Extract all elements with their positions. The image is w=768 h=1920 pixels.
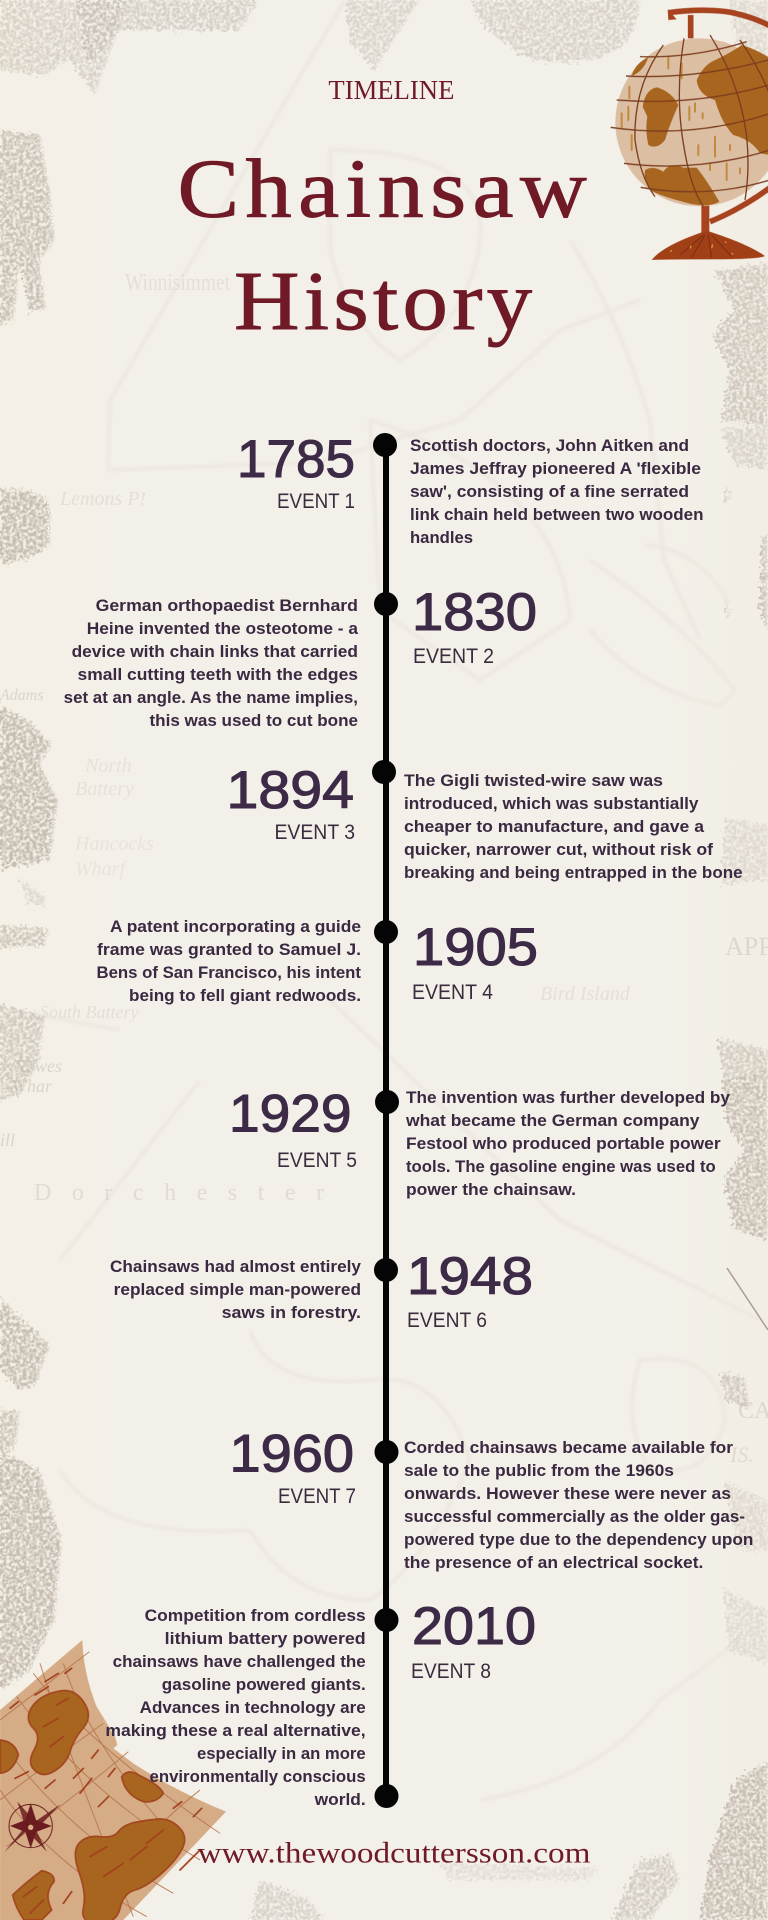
event 1 description bbox=[410, 437, 704, 547]
event 6 description: Chainsaws had almost entirely bbox=[110, 1258, 362, 1276]
event 8 heading: EVENT 8 bbox=[411, 1660, 491, 1683]
event 8 description: world. bbox=[314, 1791, 366, 1809]
event 8 description: especially in an more bbox=[197, 1745, 366, 1763]
event 5 description: what became the German company bbox=[405, 1112, 700, 1130]
background: faint map labels: Dorchester bbox=[34, 1180, 324, 1206]
background: faint map labels: Hancocks bbox=[74, 833, 154, 855]
event 4 description: A patent incorporating a guide bbox=[110, 918, 361, 936]
event 7 description: Corded chainsaws became available for bbox=[404, 1439, 734, 1457]
event 7 description bbox=[404, 1439, 753, 1572]
background: faint map labels: ill bbox=[0, 1130, 15, 1150]
kicker: TIMELINE: TIMELINE bbox=[328, 75, 454, 105]
event 3 description bbox=[404, 772, 743, 882]
event 1 description: James Jeffray pioneered A 'flexible bbox=[410, 460, 701, 478]
icon: globe on stand bbox=[611, 9, 768, 260]
event 5 heading: 1929 bbox=[229, 1084, 352, 1144]
event 3 heading: 1894 bbox=[226, 761, 354, 820]
event 2 description: small cutting teeth with the edges bbox=[78, 666, 358, 684]
event 6 description: saws in forestry. bbox=[222, 1304, 361, 1322]
event 4 heading bbox=[412, 918, 538, 1004]
globe stand arc bbox=[668, 10, 768, 222]
event 4 heading: 1905 bbox=[413, 918, 538, 977]
event 1 description: Scottish doctors, John Aitken and bbox=[410, 437, 689, 455]
event 5 heading bbox=[229, 1084, 357, 1172]
background: faint map labels: Rowes bbox=[14, 1056, 62, 1076]
background: faint map labels: Lemons P! bbox=[59, 488, 146, 510]
event 3 description: breaking and being entrapped in the bone bbox=[404, 864, 743, 882]
event 2 heading bbox=[412, 583, 537, 668]
event 1 heading: EVENT 1 bbox=[277, 490, 355, 513]
event 2 description: device with chain links that carried bbox=[72, 643, 358, 661]
event 5 heading: EVENT 5 bbox=[277, 1149, 357, 1172]
event 4 description: Bens of San Francisco, his intent bbox=[96, 964, 362, 982]
globe base bbox=[652, 231, 765, 260]
event 7 description: onwards. However these were never as bbox=[404, 1485, 731, 1503]
event 6 heading bbox=[407, 1247, 533, 1332]
background: faint map labels: Adams bbox=[0, 687, 44, 704]
event 3 description: introduced, which was substantially bbox=[404, 795, 699, 813]
background: faint map labels bbox=[0, 270, 768, 1467]
event 5 description: The invention was further developed by bbox=[406, 1089, 731, 1107]
event 3 description: quicker, narrower cut, without risk of bbox=[404, 841, 714, 859]
event 5 description: Festool who produced portable power bbox=[406, 1135, 721, 1153]
event 2 description: set at an angle. As the name implies, bbox=[64, 689, 358, 707]
event 2 heading: EVENT 2 bbox=[413, 645, 494, 668]
event 7 description: successful commercially as the older gas- bbox=[404, 1508, 745, 1526]
footer: website: www.thewoodcuttersson.com bbox=[198, 1836, 590, 1870]
event 5 description bbox=[405, 1089, 731, 1199]
event 7 heading: EVENT 7 bbox=[278, 1485, 356, 1508]
event 1 description: link chain held between two wooden bbox=[410, 506, 704, 524]
event 2 description: Heine invented the osteotome - a bbox=[87, 620, 359, 638]
globe grid lines bbox=[611, 35, 768, 207]
timeline nodes bbox=[372, 433, 399, 1808]
event 8 description: making these a real alternative, bbox=[105, 1722, 366, 1740]
map land masses bbox=[0, 1691, 185, 1920]
event 1 description: saw', consisting of a fine serrated bbox=[410, 483, 689, 501]
title bbox=[178, 142, 587, 347]
event 7 description: powered type due to the dependency upon bbox=[404, 1531, 753, 1549]
event 8 heading bbox=[411, 1597, 536, 1683]
event 2 description: this was used to cut bone bbox=[150, 712, 358, 730]
event 2 heading: 1830 bbox=[412, 583, 537, 642]
event 3 heading: EVENT 3 bbox=[274, 821, 355, 844]
background: faint map labels: Winnisimmet bbox=[125, 270, 230, 296]
globe continents bbox=[632, 45, 768, 205]
background: faint map labels: South Battery bbox=[40, 1002, 138, 1022]
background: faint map labels: Whar bbox=[12, 1076, 53, 1096]
event 6 heading: 1948 bbox=[407, 1247, 533, 1306]
map parchment bbox=[0, 1640, 226, 1920]
event 3 description: The Gigli twisted-wire saw was bbox=[404, 772, 663, 790]
event 8 heading: 2010 bbox=[412, 1597, 536, 1656]
event 6 description bbox=[110, 1258, 362, 1322]
event 6 description: replaced simple man-powered bbox=[114, 1281, 361, 1299]
event 8 description: chainsaws have challenged the bbox=[113, 1653, 366, 1671]
event 4 description: frame was granted to Samuel J. bbox=[97, 941, 361, 959]
event 8 description: environmentally conscious bbox=[150, 1768, 366, 1786]
background: faint map labels: Wharf bbox=[75, 858, 127, 880]
background: faint map labels: IS. bbox=[729, 1442, 754, 1467]
event 2 description: German orthopaedist Bernhard bbox=[96, 597, 358, 615]
timeline axis bbox=[383, 445, 389, 1796]
event 8 description: gasoline powered giants. bbox=[162, 1676, 366, 1694]
event 7 heading bbox=[230, 1424, 356, 1508]
event 1 description: handles bbox=[410, 529, 473, 547]
map grid lines bbox=[0, 1652, 220, 1917]
event 4 description bbox=[96, 918, 362, 1005]
event 8 description: lithium battery powered bbox=[165, 1630, 366, 1648]
title: Chainsaw bbox=[178, 142, 587, 236]
event 7 heading: 1960 bbox=[230, 1424, 354, 1484]
event 8 description: Competition from cordless bbox=[145, 1607, 366, 1625]
title: History bbox=[234, 254, 532, 347]
event 4 heading: EVENT 4 bbox=[412, 981, 493, 1004]
event 1 heading: 1785 bbox=[237, 430, 355, 489]
event 8 description bbox=[105, 1607, 366, 1809]
icon: treasure map bbox=[0, 1640, 226, 1920]
map compass rose bbox=[4, 1802, 61, 1853]
map hatch marks bbox=[10, 1668, 202, 1913]
background: dark chart line bbox=[727, 1268, 768, 1330]
event 7 description: the presence of an electrical socket. bbox=[404, 1554, 703, 1572]
background: faint map labels: North bbox=[84, 755, 132, 777]
event 3 description: cheaper to manufacture, and gave a bbox=[404, 818, 705, 836]
event 3 heading bbox=[226, 761, 355, 844]
event 4 description: being to fell giant redwoods. bbox=[129, 987, 361, 1005]
globe highlights bbox=[622, 57, 740, 180]
globe sphere bbox=[615, 38, 768, 206]
background: faint map labels: Bird Island bbox=[540, 983, 631, 1005]
event 6 heading: EVENT 6 bbox=[407, 1309, 487, 1332]
event 5 description: power the chainsaw. bbox=[406, 1181, 576, 1199]
event 7 description: sale to the public from the 1960s bbox=[404, 1462, 674, 1480]
event 2 description bbox=[64, 597, 359, 730]
event 5 description: tools. The gasoline engine was used to bbox=[406, 1158, 716, 1176]
event 8 description: Advances in technology are bbox=[140, 1699, 366, 1717]
background: faint map labels: Battery bbox=[75, 778, 134, 800]
